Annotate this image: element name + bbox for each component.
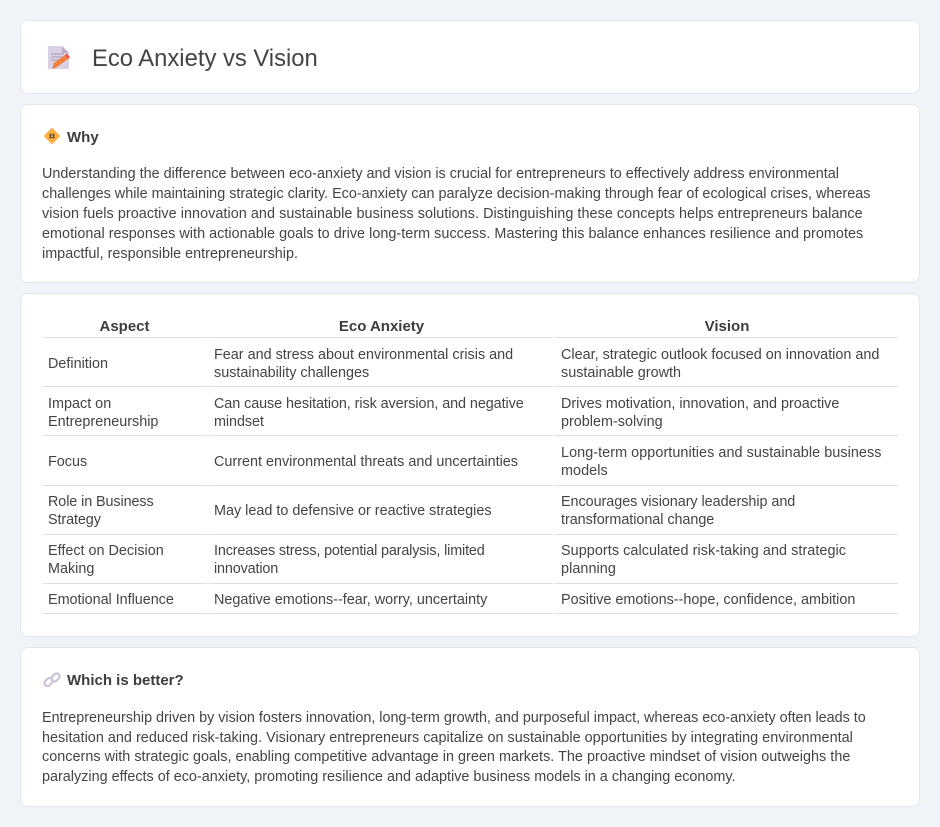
title: Eco Anxiety vs Vision [92,45,318,72]
text block: why [42,166,870,262]
text block: why: challenges while maintaining strategic clarity. Eco-anxiety can paralyze decision-making through fear of ecological crises, whereas [42,186,870,202]
text block: which is better [42,710,866,785]
row: impact: Impact on [48,396,111,412]
icon: document with pencil [48,46,70,69]
vision: decision making: Supports calculated risk-taking and strategic [561,543,846,559]
vision: definition: Clear, strategic outlook focused on innovation and [561,347,879,363]
vision: role: transformational change [561,512,714,528]
row: impact: Entrepreneurship [48,414,158,430]
eco anxiety: decision making: innovation [214,561,278,577]
vision: decision making: planning [561,561,616,577]
text block: why: Understanding the difference between eco-anxiety and vision is crucial for entrepreneurs to effectively address environmental [42,166,839,182]
eco anxiety: impact [214,396,524,430]
vision: focus: models [561,463,608,479]
text block: why: emotional responses with actionable goals to drive long-term success. Mastering this balance enhances resilience and promotes [42,226,863,242]
text block: which is better: hesitation and reduced risk-taking. Visionary entrepreneurs capitalize on sustainable opportunities by integrating environmental [42,730,853,746]
vision: impact: Drives motivation, innovation, and proactive [561,396,839,412]
vision: focus: Long-term opportunities and sustainable business [561,445,881,461]
row: impact [48,396,158,430]
table header: eco anxiety: Eco Anxiety [339,318,424,335]
text block: which is better: concerns with strategic goals, enabling competitive advantage in green markets. The proactive mindset of vision outweighs the [42,749,850,765]
vision: impact [561,396,839,430]
eco anxiety: focus: Current environmental threats and uncertainties [214,454,518,470]
icon: warning diamond [44,128,60,144]
eco anxiety: definition: Fear and stress about environmental crisis and [214,347,513,363]
vision: emotional influence: Positive emotions--hope, confidence, ambition [561,592,855,608]
eco anxiety: emotional influence: Negative emotions--fear, worry, uncertainty [214,592,487,608]
panel: why [20,104,920,283]
table header: aspect: Aspect [99,318,150,335]
vision: decision making [561,543,846,577]
row: role [48,494,154,528]
eco anxiety: definition: sustainability challenges [214,365,369,381]
eco anxiety: decision making [214,543,485,577]
vision: definition: sustainable growth [561,365,681,381]
panel: which is better [20,647,920,807]
table header: vision: Vision [705,318,749,335]
icon: link [43,672,61,688]
row: decision making: Effect on Decision [48,543,164,559]
eco anxiety: decision making: Increases stress, potential paralysis, limited [214,543,485,559]
eco anxiety: impact: mindset [214,414,264,430]
text block: why: impactful, responsible entrepreneurship. [42,246,298,262]
panel: comparison table [20,293,920,637]
row: decision making [48,543,164,577]
row: emotional influence: Emotional Influence [48,592,174,608]
panel: title [20,20,920,94]
text block: which is better: Entrepreneurship driven by vision fosters innovation, long-term growth, and purposeful impact, whereas eco-anxiety often leads to [42,710,866,726]
vision: impact: problem-solving [561,414,663,430]
eco anxiety: role: May lead to defensive or reactive strategies [214,503,492,519]
vision: role: Encourages visionary leadership and [561,494,795,510]
row: decision making: Making [48,561,94,577]
row: role: Strategy [48,512,101,528]
eco anxiety: definition [214,347,513,381]
heading: why: Why [67,129,99,146]
vision: focus [561,445,881,479]
heading: which is better: Which is better? [67,672,184,689]
row: definition: Definition [48,356,108,372]
row: focus: Focus [48,454,87,470]
text block: which is better: paralyzing effects of eco-anxiety, promoting resilience and adaptive business models in a changing economy. [42,769,736,785]
eco anxiety: impact: Can cause hesitation, risk aversion, and negative [214,396,524,412]
text block: why: vision fuels proactive innovation and sustainable business solutions. Distinguishing these concepts helps entrepreneurs balance [42,206,863,222]
vision: role [561,494,795,528]
row: role: Role in Business [48,494,154,510]
vision: definition [561,347,879,381]
